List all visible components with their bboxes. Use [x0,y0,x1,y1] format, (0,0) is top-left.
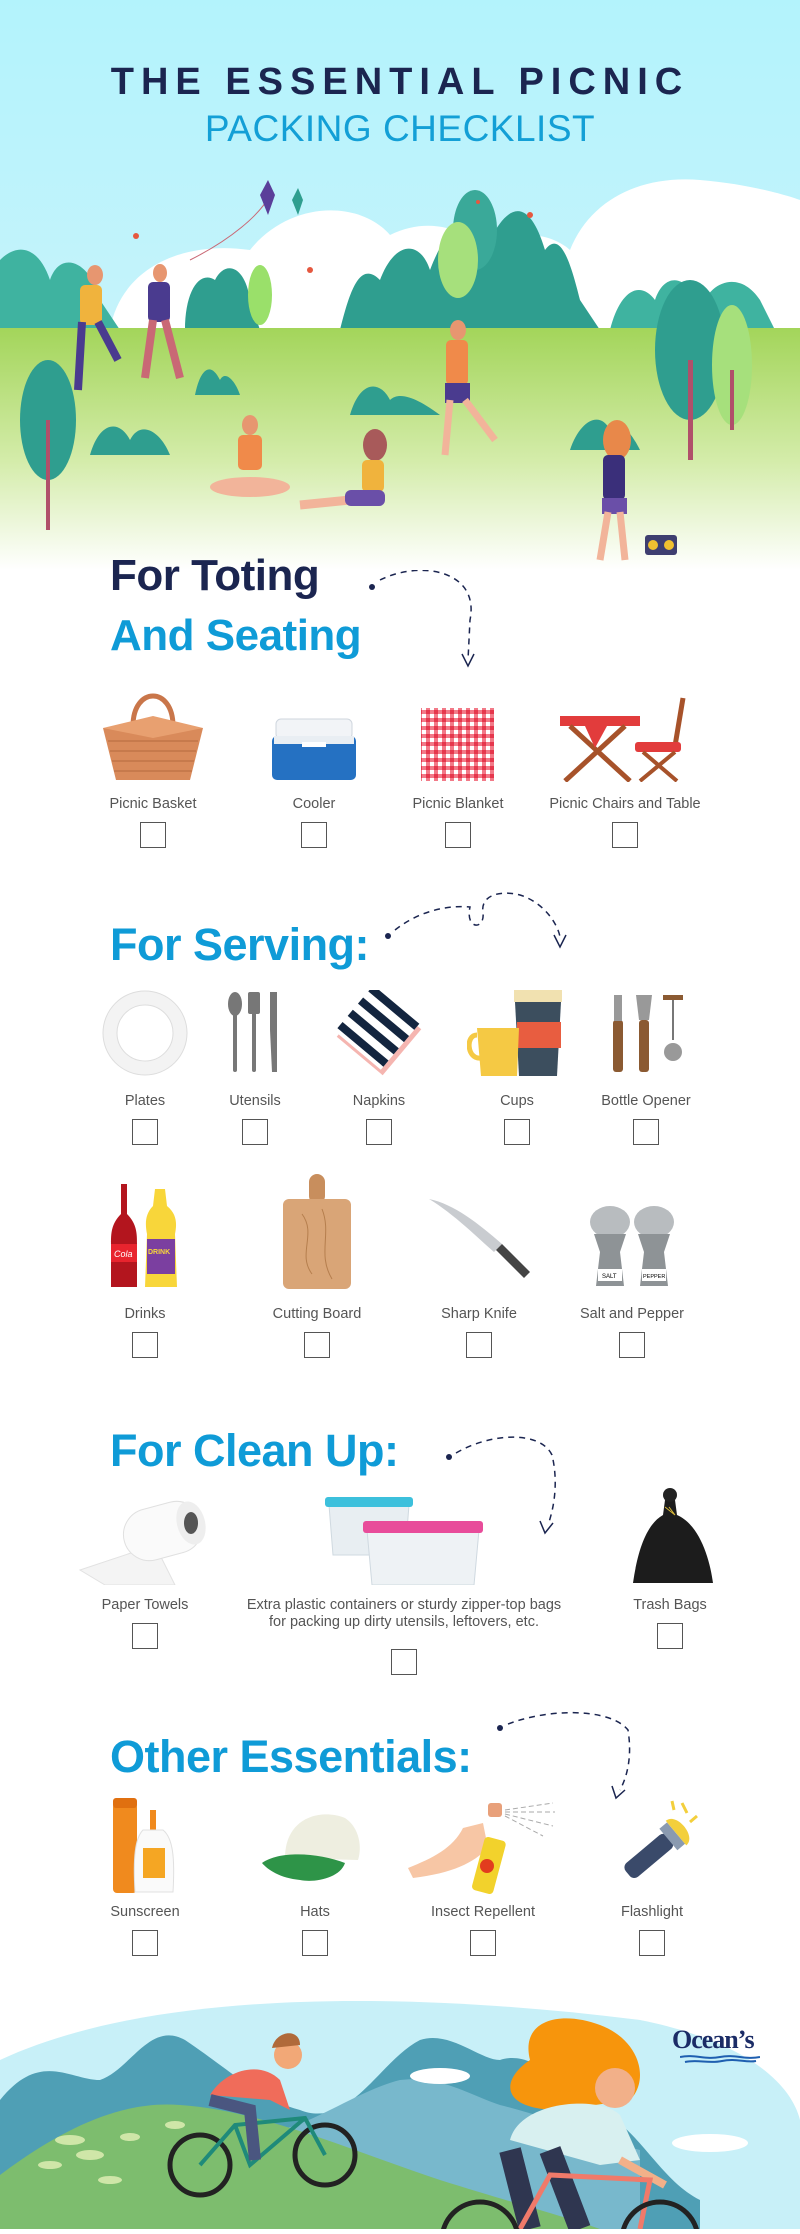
icon: cooler [272,718,356,780]
trees back [0,190,775,330]
checkbox [504,1119,530,1145]
icon: salt and pepper shakers: PEPPER [643,1274,665,1280]
label: Picnic Blanket [412,796,504,812]
checkbox [304,1332,330,1358]
logo: Ocean's [672,2026,772,2066]
checkbox [391,1649,417,1675]
icon: basket [103,694,203,780]
item: Sunscreen [60,1797,230,1799]
item: Bottle Opener [601,995,691,1145]
item: Cups [467,990,562,1145]
foreground trees [20,280,752,530]
label: Salt and Pepper [580,1306,684,1322]
icon: drinks: Cola [114,1249,133,1259]
item: Drinks [110,1184,177,1358]
item: Sharp Knife [429,1199,530,1358]
heading: Other Essentials: Other Essentials: [110,1731,472,1782]
icon: paper towel roll [79,1500,206,1585]
checkbox [633,1119,659,1145]
header scene [0,0,800,561]
checkbox [619,1332,645,1358]
arrow: toting [369,570,475,668]
checkbox [301,822,327,848]
icon: cutting board [283,1174,351,1289]
title [111,61,689,149]
label: Hats [300,1904,330,1920]
item: Insect Repellent [398,1797,568,1799]
icon: knife [429,1199,530,1278]
checkbox [132,1930,158,1956]
label: Picnic Chairs and Table [549,796,701,812]
item: Picnic Blanket [412,708,504,848]
label: Insect Repellent [431,1904,535,1920]
item: Utensils [228,992,281,1145]
heading: For Toting And Seating [110,551,361,660]
icon: chairs and table [560,698,686,782]
item: Trash Bags [633,1488,713,1649]
icon: plastic containers [325,1497,483,1585]
checkbox [366,1119,392,1145]
checkbox [132,1119,158,1145]
icon: plate [102,990,188,1076]
stars [133,200,533,273]
checkbox [132,1332,158,1358]
item: Picnic Chairs and Table [549,698,701,848]
logo: Ocean's: Ocean’s [672,2025,754,2054]
label: Sunscreen [110,1904,180,1920]
checkbox [470,1930,496,1956]
arrow: other essentials [497,1712,630,1800]
label: Sharp Knife [441,1306,517,1322]
title: THE ESSENTIAL PICNIC [111,61,689,103]
label [247,1597,561,1630]
heading: For Toting And Seating: For Toting [110,551,319,600]
checkbox [140,822,166,848]
icon: insect repellent spray [403,1798,563,1897]
label: Extra plastic containers or sturdy zipper-top bags [247,1597,561,1613]
label: Cups [500,1093,534,1109]
icon: cap [260,1798,370,1897]
arrow: serving [385,892,567,948]
icon: striped napkin [336,990,422,1076]
icon: utensils [228,992,277,1072]
item: Flashlight [567,1797,737,1799]
icon: sunscreen [105,1798,185,1897]
item: Paper Towels [79,1500,206,1649]
item: Cutting Board [273,1174,361,1358]
label: Cooler [293,796,335,812]
checkbox [639,1930,665,1956]
icon: trash bag [633,1488,713,1583]
label: Flashlight [621,1904,683,1920]
icon: flashlight [602,1798,702,1897]
icon: bottle opener [613,995,683,1072]
label: Utensils [229,1093,281,1109]
item: Picnic Basket [103,694,203,848]
checkbox [612,822,638,848]
item: Extra plastic containers [247,1497,561,1675]
item: Plates [102,990,188,1145]
item: Cooler [272,718,356,848]
label: Cutting Board [273,1306,361,1322]
checkbox [302,1930,328,1956]
icon: cups [467,990,562,1076]
heading: For Serving: For Serving: [110,919,369,970]
label: Picnic Basket [109,796,197,812]
arrow: clean up [446,1436,556,1534]
label: Bottle Opener [601,1093,691,1109]
icon: salt and pepper shakers [590,1206,674,1286]
title: PACKING CHECKLIST [205,108,595,149]
label: Plates [125,1093,165,1109]
label: Trash Bags [633,1597,707,1613]
item: Salt and Pepper [580,1206,684,1358]
icon: drinks [110,1184,177,1287]
label: Drinks [124,1306,166,1322]
checkbox [132,1623,158,1649]
label: Paper Towels [102,1597,188,1613]
people [78,180,677,560]
man cyclist [170,2033,355,2195]
footer scene: cyclists [0,2000,800,2229]
item: Hats [230,1797,400,1799]
checkbox [445,822,471,848]
checkbox [242,1119,268,1145]
item: Napkins [336,990,422,1145]
icon: salt and pepper shakers: SALT [602,1274,617,1280]
icon: drinks: DRINK [148,1249,170,1256]
heading: For Toting And Seating: And Seating [110,611,361,660]
woman cyclist [442,2018,698,2234]
checkbox [466,1332,492,1358]
checkbox [657,1623,683,1649]
icon: gingham blanket [421,708,494,781]
label: for packing up dirty utensils, leftovers, etc. [269,1614,539,1630]
heading: For Clean Up: For Clean Up: [110,1425,399,1476]
label: Napkins [353,1093,405,1109]
